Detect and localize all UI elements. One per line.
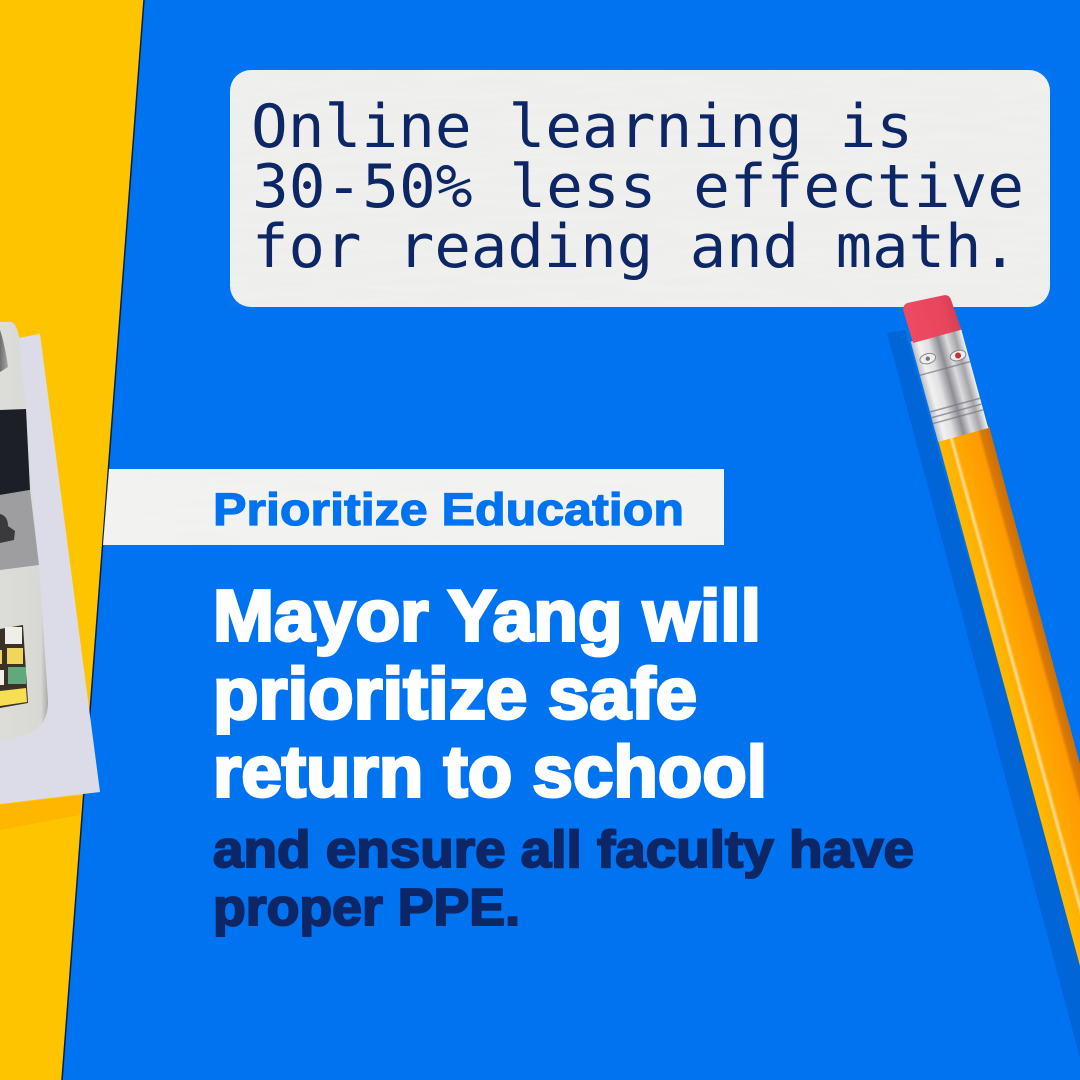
callout text: for reading and math. [252, 212, 1018, 282]
pencil eraser [902, 291, 961, 343]
headline [213, 576, 767, 812]
callout paper texture [230, 70, 1050, 307]
calculator keypad [0, 625, 28, 708]
subheading [213, 821, 914, 937]
panel: yellow left band [0, 0, 144, 1080]
callout text: Online learning is [251, 92, 913, 162]
callout text [251, 92, 1024, 282]
callout text: 30-50% less effective [252, 152, 1024, 222]
panel: stat callout [230, 70, 1050, 307]
illustration: pencil [901, 291, 1080, 966]
headline: return to school [213, 732, 767, 812]
tag paper texture [103, 469, 724, 545]
calculator metal section [0, 490, 39, 570]
paper sheet [0, 334, 100, 804]
pencil ferrule [911, 328, 988, 442]
tag background [103, 469, 724, 545]
paper shadow [0, 795, 82, 830]
pencil shadow [887, 330, 1080, 1058]
tag text: Prioritize Education [213, 484, 684, 535]
label: section tag [103, 469, 724, 545]
illustration: calculator on paper [0, 322, 100, 830]
pencil wood barrel [938, 426, 1080, 966]
headline: prioritize safe [213, 654, 697, 734]
band edge line [62, 0, 144, 1080]
calculator dark display [0, 409, 30, 495]
subheading: proper PPE. [213, 879, 520, 937]
headline: Mayor Yang will [213, 576, 761, 656]
calculator dial [0, 514, 15, 543]
ferrule grooves [920, 362, 983, 424]
subheading: and ensure all faculty have [213, 821, 914, 879]
calculator top vent [0, 330, 8, 372]
calculator body [0, 322, 48, 742]
callout background [230, 70, 1050, 307]
ferrule dents [919, 344, 967, 370]
